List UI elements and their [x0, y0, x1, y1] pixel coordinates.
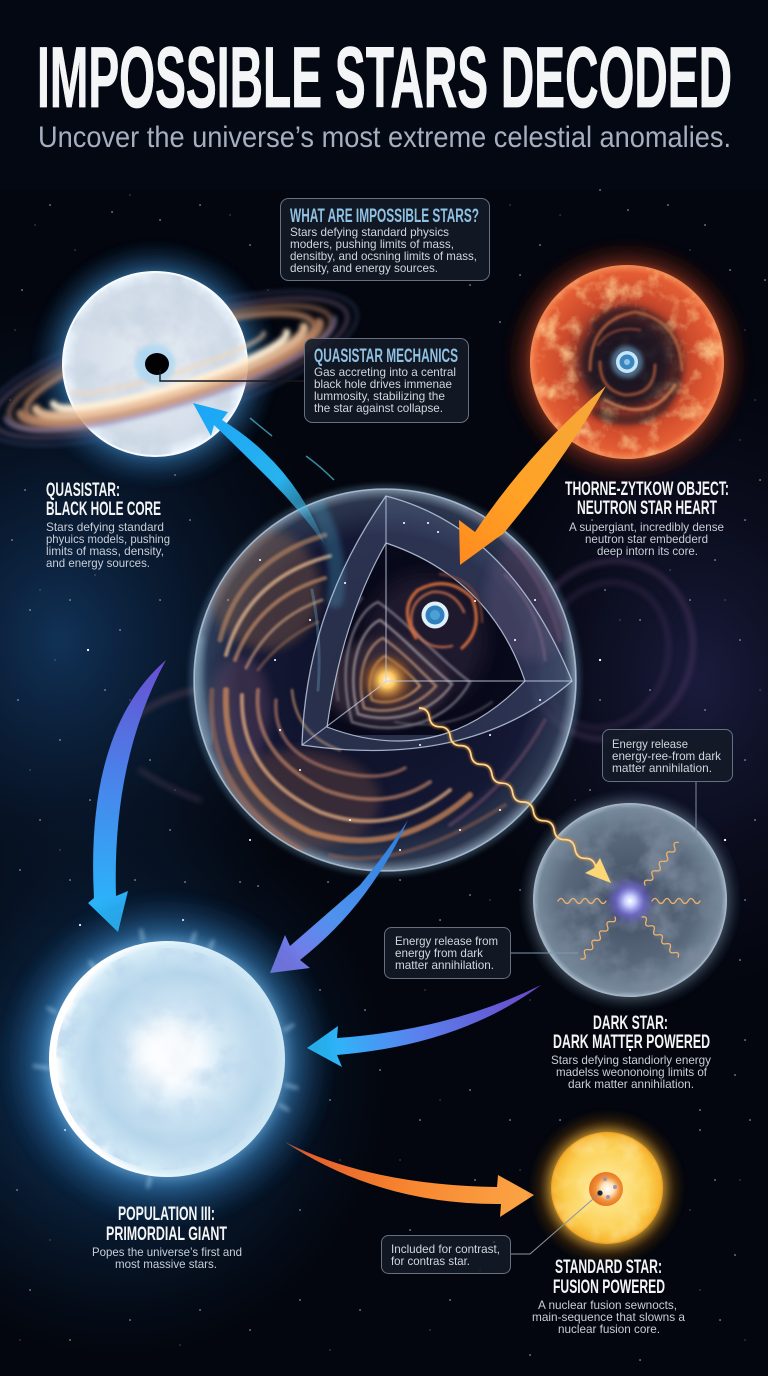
star: population III — [0, 889, 337, 1229]
quasistar body — [62, 271, 248, 457]
callout: what are impossible stars — [280, 198, 490, 280]
gas swirls — [199, 480, 575, 858]
label: quasistar: limits of mass, density, — [46, 544, 164, 558]
label: standard star: STANDARD STAR: — [555, 1257, 662, 1278]
callout: quasistar mechanics: the star against collapse. — [314, 401, 443, 415]
callout: quasistar mechanics — [304, 338, 468, 422]
callout: standard star contrast: Included for contrast, — [391, 1242, 500, 1256]
label: standard star: nuclear fusion core. — [558, 1322, 660, 1336]
sphere rim — [194, 489, 576, 871]
callout: dark star energy top: matter annihilation. — [612, 761, 712, 775]
faint outer swirl rings — [120, 537, 718, 800]
arrow: sphere to quasistar — [193, 403, 334, 545]
wedge outer shell — [302, 496, 572, 750]
label: standard star — [532, 1257, 685, 1336]
callout: what are impossible stars: WHAT ARE IMPOSSIBLE STARS? — [290, 206, 479, 227]
energy beam into dark star — [419, 708, 611, 883]
label: standard star: A nuclear fusion sewnocts, — [538, 1298, 677, 1312]
neutron star with spiral — [407, 574, 482, 648]
callout: dark star energy top: Energy release — [612, 737, 688, 751]
arrow: dark star to population III — [307, 985, 541, 1067]
label: dark star: Stars defying standiorly energy — [551, 1053, 711, 1067]
sphere soft halo — [193, 488, 577, 872]
dark star body — [533, 803, 727, 997]
quasistar glow — [30, 239, 280, 489]
TZO body — [530, 265, 724, 459]
label: dark star — [551, 1013, 711, 1091]
label: population III — [92, 1204, 242, 1271]
accretion disk front — [4, 312, 346, 455]
label: Thorne-Zytkow — [565, 479, 729, 558]
accretion disk back — [0, 259, 372, 477]
label: population III: PRIMORDIAL GIANT — [106, 1224, 227, 1245]
label: population III: most massive stars. — [115, 1257, 217, 1271]
callout: dark star energy left — [384, 928, 578, 978]
dark star core — [604, 875, 656, 927]
callout: what are impossible stars: densitby, and ocsning limits of mass, — [290, 249, 477, 263]
callout: what are impossible stars: density, and energy sources. — [290, 261, 438, 275]
TZO spiral — [581, 311, 682, 420]
stars inside sphere — [250, 523, 540, 850]
star: dark star — [518, 788, 742, 1012]
wedge axes — [302, 496, 572, 745]
label: standard star: FUSION POWERED — [553, 1277, 665, 1298]
arrow: population III to standard star — [285, 1142, 534, 1217]
label: Thorne-Zytkow: A supergiant, incredibly dense — [569, 520, 724, 534]
label: standard star: main-sequence that slowns a — [532, 1310, 685, 1324]
label: dark star: madelss weononoing limits of — [556, 1065, 708, 1079]
standard star glow — [527, 1108, 687, 1268]
wedge inner cut — [328, 544, 524, 735]
label: quasistar: QUASISTAR: — [46, 480, 120, 501]
callout: dark star energy left: matter annihilation. — [395, 958, 494, 972]
label: population III: Popes the universe’s first and — [92, 1245, 242, 1259]
callout: dark star energy left: Energy release from — [395, 934, 498, 948]
callout: quasistar mechanics: QUASISTAR MECHANICS — [314, 346, 458, 367]
callout: dark star energy left: energy from dark — [395, 946, 484, 960]
label: quasistar: BLACK HOLE CORE — [46, 499, 161, 520]
label: Thorne-Zytkow: neutron star embedderd — [585, 532, 708, 546]
standard star body — [551, 1132, 663, 1244]
star: quasistar with black hole core — [0, 239, 372, 489]
label: population III: POPULATION III: — [118, 1204, 215, 1225]
central sphere: cutaway star — [120, 480, 718, 872]
label: quasistar: Stars defying standard — [46, 520, 164, 534]
star: standard star — [527, 1108, 687, 1268]
callout: standard star contrast: for contras star. — [391, 1254, 470, 1268]
arrow: sphere to Thorne-Zytkow — [459, 386, 606, 565]
arrow: sphere to population III lower — [270, 820, 408, 973]
callout: dark star energy top — [602, 730, 732, 843]
callout: what are impossible stars: moders, pushing limits of mass, — [290, 237, 454, 251]
callout line: quasistar — [160, 370, 305, 381]
arrow: sphere to population III — [88, 660, 166, 932]
dark star glow — [518, 788, 742, 1012]
label: quasistar: phyuics models, pushing — [46, 532, 170, 546]
black hole — [135, 344, 175, 384]
sphere glass body — [194, 489, 576, 871]
wedge inner outline — [327, 543, 525, 741]
callout: quasistar mechanics: black hole drives immenae — [314, 377, 452, 391]
label: dark star: dark matter annihilation. — [568, 1077, 694, 1091]
pop III flares — [34, 930, 297, 1187]
callout: what are impossible stars: Stars defying standard physics — [290, 225, 449, 239]
callout: dark star energy top: energy-ree-from dark — [612, 749, 722, 763]
star: Thorne-Zytkow object — [502, 237, 752, 487]
pop III body — [49, 941, 285, 1177]
label: quasistar — [46, 480, 170, 570]
callout: quasistar mechanics: Gas accreting into a central — [314, 365, 456, 379]
pop III glow — [0, 889, 337, 1229]
beam arrowhead — [585, 858, 611, 883]
label: Thorne-Zytkow: deep intorn its core. — [597, 544, 698, 558]
label: dark star: DARK STAR: — [593, 1013, 668, 1034]
callout: standard star contrast — [382, 1190, 603, 1274]
label: quasistar: and energy sources. — [46, 556, 150, 570]
standard star core — [589, 1172, 623, 1206]
neutron core — [611, 346, 643, 378]
radiating wavy rays — [558, 841, 700, 961]
TZO glow — [502, 237, 752, 487]
callout: quasistar mechanics: lummosity, stabilizing the — [314, 389, 445, 403]
